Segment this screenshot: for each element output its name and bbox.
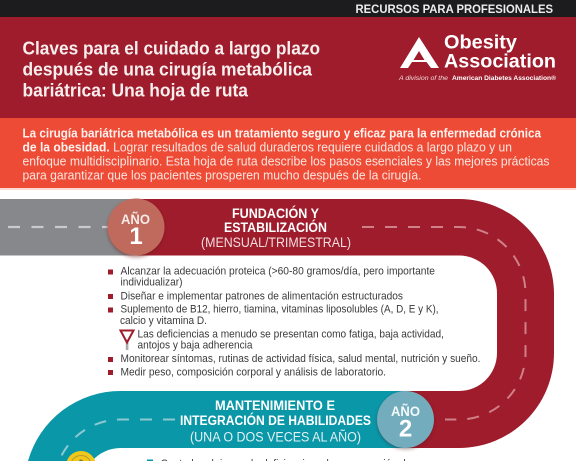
intro panel — [0, 118, 576, 190]
stage 1 heading: (MENSUAL/TRIMESTRAL) — [201, 235, 351, 250]
intro text: enfoque multidisciplinario. Esta hoja de ruta describe los pasos esenciales y las mejores prácticas — [22, 154, 550, 168]
intro text: de la obesidad. Lograr resultados de salud duraderos requiere cuidados a largo plazo y un — [22, 140, 512, 154]
year 2 badge — [377, 391, 434, 450]
title — [22, 38, 320, 100]
year 2 badge: AÑO — [391, 402, 420, 419]
logo: Obesity Association: A division of the — [398, 76, 449, 82]
warning note: Las deficiencias a menudo se presentan como fatiga, baja actividad, — [138, 328, 444, 340]
stage 2 heading: MANTENIMIENTO E — [215, 398, 335, 413]
warning note: antojos y baja adherencia — [138, 340, 252, 352]
stage 1 checklist — [108, 266, 480, 378]
stage 2 heading: INTEGRACIÓN DE HABILIDADES — [180, 413, 371, 428]
header panel — [0, 17, 576, 118]
bullet list items: calcio y vitamina D. — [120, 315, 207, 327]
further bullet items: Monitorear síntomas, rutinas de actividad física, salud mental, nutrición y sueño. — [120, 353, 480, 365]
intro text: La cirugía bariátrica metabólica es un tratamiento seguro y eficaz para la enfermedad crónica — [22, 126, 542, 140]
top bar: resource label: RECURSOS PARA PROFESIONALES — [356, 2, 553, 16]
road: red segment — [136, 199, 554, 448]
further bullet items: Medir peso, composición corporal y análisis de laboratorio. — [120, 366, 386, 378]
bullet list items: individualizar) — [120, 276, 182, 288]
stage 2 heading: (UNA O DOS VECES AL AÑO) — [190, 430, 361, 444]
bullet list items — [108, 266, 438, 327]
icon: yellow road sign — [66, 451, 96, 461]
stage 2 heading — [180, 398, 371, 444]
year 2 badge: 2 — [399, 416, 412, 442]
logo: Obesity Association: Association — [444, 52, 556, 72]
year 1 badge: 1 — [129, 223, 143, 250]
logo: Obesity Association: American Diabetes Association® — [452, 75, 557, 82]
title: Claves para el cuidado a largo plazo — [22, 38, 320, 58]
warning note — [138, 328, 444, 352]
road: teal segment — [28, 391, 410, 461]
year 1 badge — [108, 198, 164, 258]
stage 1 heading: FUNDACIÓN Y — [232, 206, 319, 221]
year 1 badge: AÑO — [121, 210, 150, 227]
bullet list items: Diseñar e implementar patrones de alimentación estructurados — [120, 290, 404, 302]
bullet list items: Alcanzar la adecuación proteica (>60-80 gramos/día, pero importante — [120, 266, 435, 278]
top bar: resource label — [0, 0, 576, 17]
logo: Obesity Association: Obesity — [444, 32, 517, 54]
stage 1 heading — [201, 206, 351, 250]
intro text — [22, 126, 550, 182]
title: después de una cirugía metabólica — [22, 58, 313, 80]
title: bariátrica: Una hoja de ruta — [22, 80, 249, 100]
bullet list items: Suplemento de B12, hierro, tiamina, vitaminas liposolubles (A, D, E y K), — [120, 304, 438, 316]
intro text: para garantizar que los pacientes prosperen mucho después de la cirugía. — [22, 168, 422, 182]
icon: yield sign — [120, 330, 134, 350]
further bullet items — [108, 353, 480, 378]
logo: Obesity Association — [398, 32, 557, 82]
road: grey segment — [0, 199, 140, 256]
stage 1 heading: ESTABILIZACIÓN — [224, 220, 327, 235]
